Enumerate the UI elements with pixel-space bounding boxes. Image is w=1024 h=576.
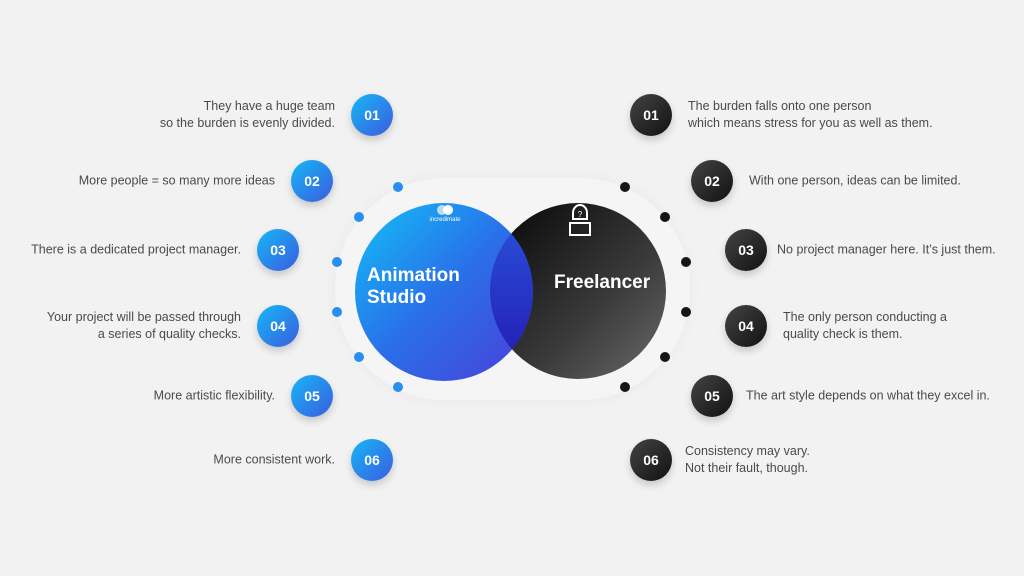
overlap lens xyxy=(490,234,533,350)
text: The burden falls onto one person xyxy=(688,99,871,113)
logo: incredimate xyxy=(429,205,460,223)
text: quality check is them. xyxy=(783,327,902,341)
label: animation studio: Animation xyxy=(367,265,460,286)
label: animation studio xyxy=(367,265,460,308)
text: Your project will be passed through xyxy=(47,310,241,324)
text: 03 xyxy=(270,242,286,258)
text: 02 xyxy=(704,173,720,189)
text: 01 xyxy=(643,107,659,123)
text: 06 xyxy=(643,452,659,468)
right items xyxy=(627,94,996,488)
left items xyxy=(31,94,396,488)
text: 05 xyxy=(704,388,720,404)
icon: hooded person: ? xyxy=(578,210,583,219)
text: The only person conducting a xyxy=(783,310,947,324)
dots xyxy=(257,182,767,480)
circle: animation studio xyxy=(355,203,533,381)
text: More consistent work. xyxy=(213,452,335,466)
frosted backdrop xyxy=(335,178,690,400)
label: animation studio: Studio xyxy=(367,287,426,308)
text: 02 xyxy=(304,173,320,189)
text: 05 xyxy=(304,388,320,404)
text: Not their fault, though. xyxy=(685,461,808,475)
text: 04 xyxy=(738,318,754,334)
text: The art style depends on what they excel in. xyxy=(746,388,990,402)
text: 01 xyxy=(364,107,380,123)
text: 04 xyxy=(270,318,286,334)
text: They have a huge team xyxy=(204,99,335,113)
circle: freelancer xyxy=(490,203,666,379)
label: freelancer: Freelancer xyxy=(554,272,650,293)
text: More people = so many more ideas xyxy=(79,174,275,188)
venn circles xyxy=(355,203,666,381)
text: 06 xyxy=(364,452,380,468)
text: a series of quality checks. xyxy=(98,327,241,341)
icon: hooded person xyxy=(569,204,591,236)
text: Consistency may vary. xyxy=(685,444,810,458)
text: There is a dedicated project manager. xyxy=(31,242,241,256)
text: With one person, ideas can be limited. xyxy=(749,174,961,188)
text: More artistic flexibility. xyxy=(154,388,275,402)
text: so the burden is evenly divided. xyxy=(160,116,335,130)
text: which means stress for you as well as them. xyxy=(688,116,933,130)
text: No project manager here. It’s just them. xyxy=(777,242,996,256)
text: 03 xyxy=(738,242,754,258)
logo: incredimate: incredimate xyxy=(429,217,460,223)
